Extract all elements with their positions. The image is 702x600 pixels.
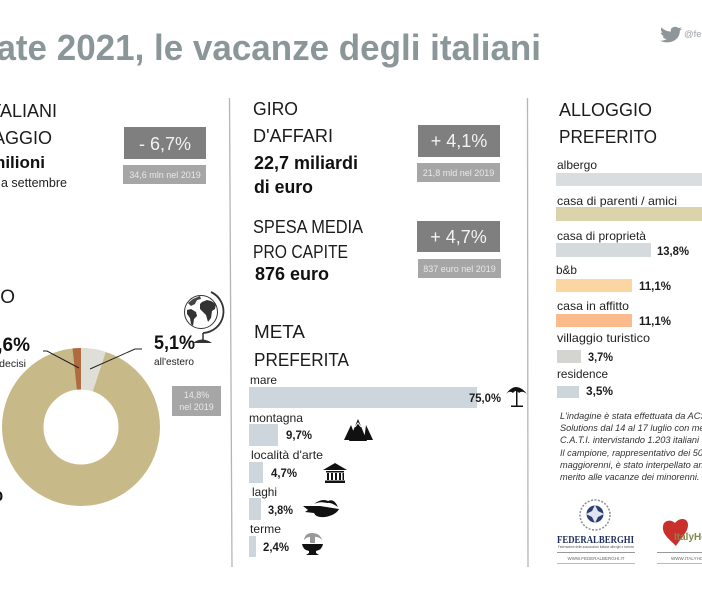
heading: alloggio preferito: ALLOGGIO <box>559 100 652 120</box>
icon: twitter handle <box>660 27 702 42</box>
heading: alloggio preferito: PREFERITO <box>559 127 657 147</box>
badge: estero 2019: nel 2019 <box>179 402 214 412</box>
text block: nota metodologica <box>560 411 702 482</box>
panel: meta preferita <box>249 322 527 557</box>
bar: villaggio turistico: villaggio turistico <box>557 331 650 345</box>
badge: dato 2019 <box>123 165 206 184</box>
badge: variazione spesa <box>417 221 500 252</box>
heading: italiani in viaggio <box>0 101 57 148</box>
heading: spesa media <box>253 217 363 262</box>
bar: terme: 2,4% <box>263 540 289 554</box>
bar: laghi <box>249 485 293 520</box>
bar: montagna: montagna <box>249 411 303 425</box>
bar: residence: 3,5% <box>586 384 613 398</box>
bar: casa in affitto <box>556 299 671 328</box>
bar: laghi: laghi <box>252 485 277 499</box>
bar: residence: residence <box>557 367 608 381</box>
bar: casa in affitto: 11,1% <box>639 314 671 328</box>
logo: federalberghi: Federazione delle associazioni italiane alberghi e turismo <box>558 545 634 549</box>
text: valore giro d'affari: 22,7 miliardi <box>254 153 358 173</box>
panel: italiani in viaggio <box>0 101 206 190</box>
icon: lake <box>303 500 339 517</box>
label: estero: 5,1% <box>154 333 195 354</box>
bar: casa di parenti / amici: casa di parenti / amici <box>557 194 677 208</box>
bar: laghi: 3,8% <box>268 503 293 517</box>
badge: variazione giro d'affari: + 4,1% <box>431 131 487 151</box>
panel: spesa media <box>253 217 501 284</box>
text: valore spesa: 876 euro <box>255 264 329 284</box>
badge: giro d'affari 2019: 21,8 mld nel 2019 <box>423 168 494 178</box>
bar: villaggio turistico <box>557 331 650 364</box>
bar: b&b: b&b <box>556 263 577 277</box>
bar: montagna <box>249 411 312 446</box>
heading: meta preferita <box>254 322 349 370</box>
badge: giro d'affari 2019 <box>417 163 500 182</box>
label: estero: all'estero <box>154 356 194 368</box>
bar: terme: terme <box>250 522 281 536</box>
bar: terme <box>249 522 289 557</box>
heading: giro d'affari <box>253 99 333 146</box>
bar: b&b <box>556 263 671 293</box>
bar: mare: 75,0% <box>469 391 501 405</box>
heading: giro d'affari: D'AFFARI <box>253 126 333 146</box>
bar: casa di parenti / amici <box>556 194 702 221</box>
badge: estero 2019: 14,8% <box>184 390 209 400</box>
bar: montagna: 9,7% <box>286 428 312 442</box>
leader line: indecisi <box>43 351 79 368</box>
icon: globe <box>184 292 223 343</box>
panel: giro d'affari <box>253 99 500 197</box>
icon: umbrella <box>506 387 527 407</box>
heading: spesa media: SPESA MEDIA <box>253 217 363 237</box>
badge: spesa 2019: 837 euro nel 2019 <box>423 264 496 274</box>
badge: variazione italiani: - 6,7% <box>139 134 191 154</box>
badge: spesa 2019 <box>418 259 501 278</box>
badge: estero 2019 <box>172 386 221 416</box>
bar: mare <box>249 373 501 408</box>
leader line: estero <box>90 349 142 369</box>
bar: casa di proprietà: 13,8% <box>657 244 689 258</box>
bar: località d'arte: località d'arte <box>251 448 323 462</box>
heading: spesa media: PRO CAPITE <box>253 242 348 262</box>
icon: mountains <box>344 419 373 441</box>
text: valore giro d'affari <box>254 153 358 197</box>
heading: alloggio preferito <box>559 100 657 147</box>
heading: meta preferita: PREFERITA <box>254 350 349 370</box>
bar: casa di proprietà <box>556 229 689 258</box>
panel: alloggio preferito <box>556 100 702 398</box>
bar: albergo <box>556 158 702 186</box>
bar: b&b: 11,1% <box>639 279 671 293</box>
text block: nota metodologica: merito alle vacanze dei minorenni. <box>560 472 699 482</box>
donut chart <box>17 363 145 491</box>
logo: italyhoteliers <box>657 519 702 564</box>
heading: meta preferita: META <box>254 322 305 342</box>
badge: variazione italiani <box>124 127 206 159</box>
logo: federalberghi: FEDERALBERGHI <box>557 534 634 546</box>
text: valore giro d'affari: di euro <box>254 177 313 197</box>
logo: federalberghi <box>557 500 635 564</box>
icon: fountain <box>302 533 323 555</box>
badge: variazione giro d'affari <box>418 125 500 157</box>
bar: villaggio turistico: 3,7% <box>588 350 613 364</box>
bar: località d'arte: 4,7% <box>271 466 297 480</box>
logo: federalberghi: WWW.FEDERALBERGHI.IT <box>567 556 625 561</box>
bar: casa in affitto: casa in affitto <box>557 299 629 313</box>
bar: albergo: albergo <box>557 158 597 172</box>
badge: dato 2019: 34,6 mln nel 2019 <box>129 170 201 180</box>
bar: residence <box>557 367 613 398</box>
bar: casa di proprietà: casa di proprietà <box>557 229 646 243</box>
bar: mare: mare <box>250 373 277 387</box>
icon: temple <box>323 463 347 483</box>
badge: variazione spesa: + 4,7% <box>430 227 487 247</box>
label: estero <box>154 333 195 368</box>
panel: destinazione <box>0 287 223 506</box>
heading: giro d'affari: GIRO <box>253 99 298 119</box>
label: indecisi <box>0 335 30 370</box>
bar: località d'arte <box>249 448 323 483</box>
